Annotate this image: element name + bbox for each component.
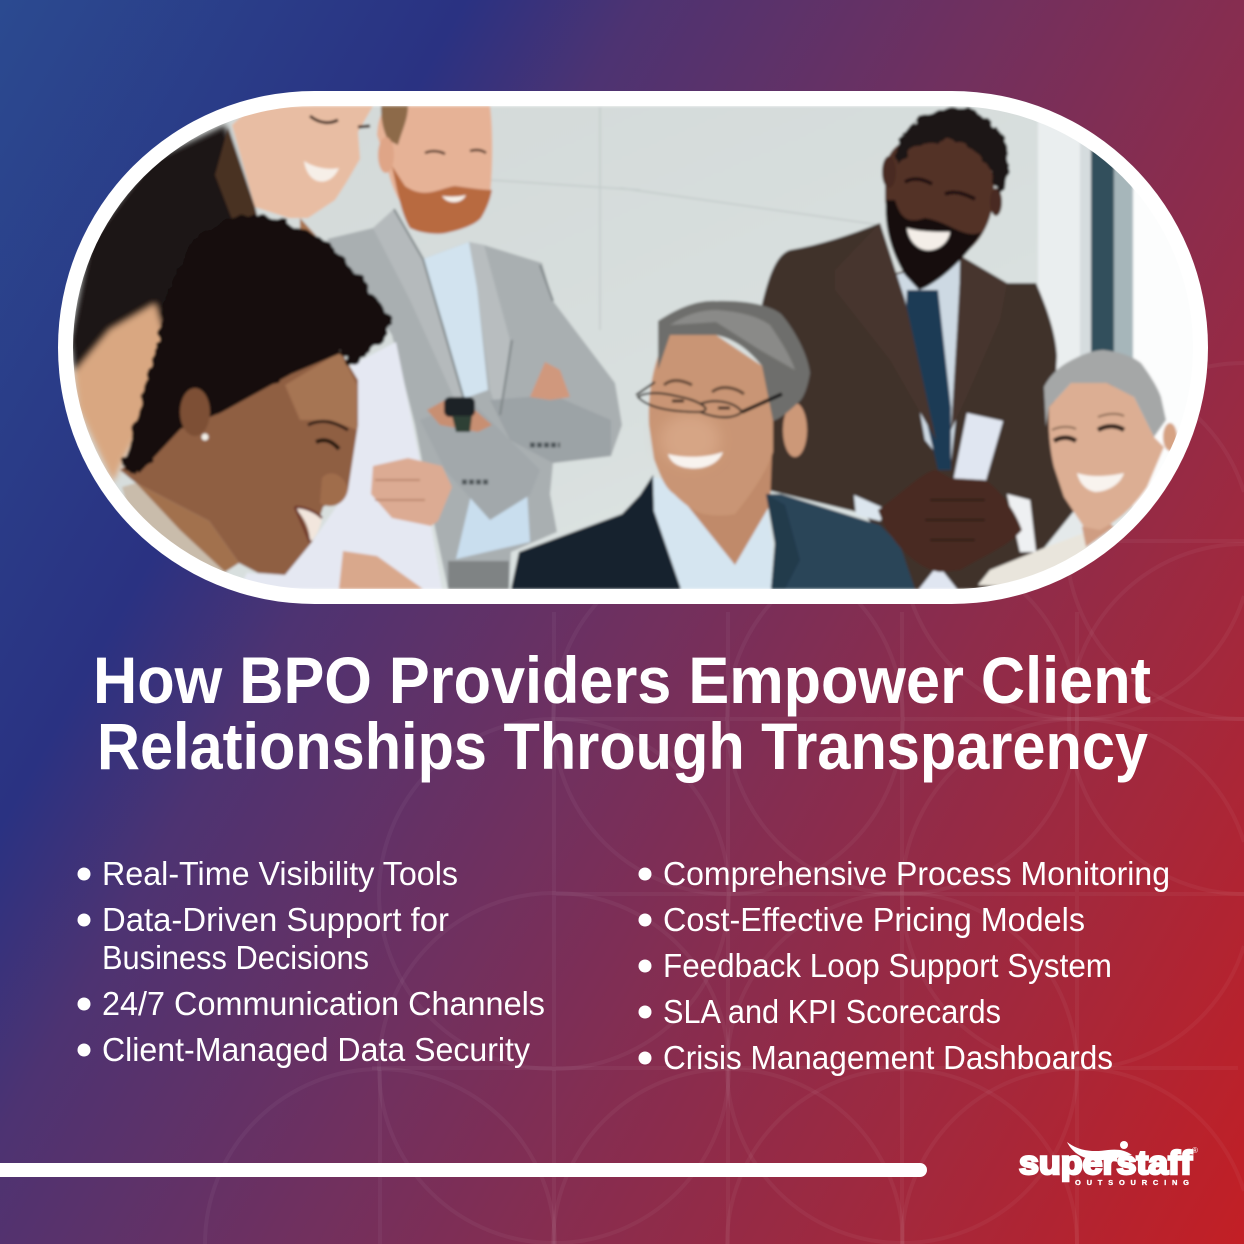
person: man in grey suit bbox=[327, 106, 622, 589]
bullet list: right column: SLA and KPI Scorecards bbox=[663, 993, 1001, 1030]
person: bearded man in brown suit bbox=[762, 107, 1074, 589]
person: left woman with dark hair, blurred bbox=[70, 125, 260, 483]
white pill border bbox=[58, 91, 1208, 604]
white footer bar bbox=[0, 1163, 927, 1177]
bullet list: right column: Crisis Management Dashboards bbox=[663, 1039, 1113, 1076]
bullet list: right column: Feedback Loop Support System bbox=[663, 947, 1112, 984]
title: Relationships Through Transparency bbox=[97, 709, 1148, 783]
person: top woman smiling bbox=[215, 106, 373, 240]
bullet list: left column: Data-Driven Support for bbox=[102, 901, 449, 938]
photo frame: white pill with team photo bbox=[58, 91, 1208, 604]
paper held by woman bbox=[239, 342, 442, 589]
bullet list: right column: Cost-Effective Pricing Models bbox=[663, 901, 1085, 938]
registered mark: ® bbox=[1192, 1146, 1198, 1155]
bullet list: left column: Client-Managed Data Security bbox=[102, 1031, 530, 1068]
logo: superstaff outsourcing bbox=[1019, 1141, 1198, 1187]
bullet list: right column bbox=[638, 855, 1170, 1076]
bullet list: left column: Business Decisions bbox=[102, 939, 369, 976]
bullet list: left column bbox=[78, 855, 545, 1068]
background pattern of circles and lines bbox=[205, 363, 1244, 1244]
logo tagline: OUTSOURCING bbox=[1075, 1178, 1189, 1187]
logo swoosh and dot bbox=[1067, 1142, 1132, 1160]
bullet list: left column: 24/7 Communication Channels bbox=[102, 985, 545, 1022]
logo wordmark: superstaff bbox=[1019, 1144, 1193, 1181]
rolled paper and clasped hands bbox=[854, 413, 1036, 589]
bullet list: left column: Real-Time Visibility Tools bbox=[102, 855, 458, 892]
title: How BPO Providers Empower Client bbox=[93, 643, 1151, 717]
person: woman with short grey hair bbox=[978, 350, 1177, 589]
bullet list: right column: Comprehensive Process Monitoring bbox=[663, 855, 1170, 892]
team photo bbox=[70, 106, 1198, 589]
person: seated man with glasses bbox=[511, 301, 915, 589]
person: woman with afro bbox=[120, 216, 392, 589]
title bbox=[93, 643, 1151, 783]
hands on the paper bbox=[339, 458, 452, 589]
